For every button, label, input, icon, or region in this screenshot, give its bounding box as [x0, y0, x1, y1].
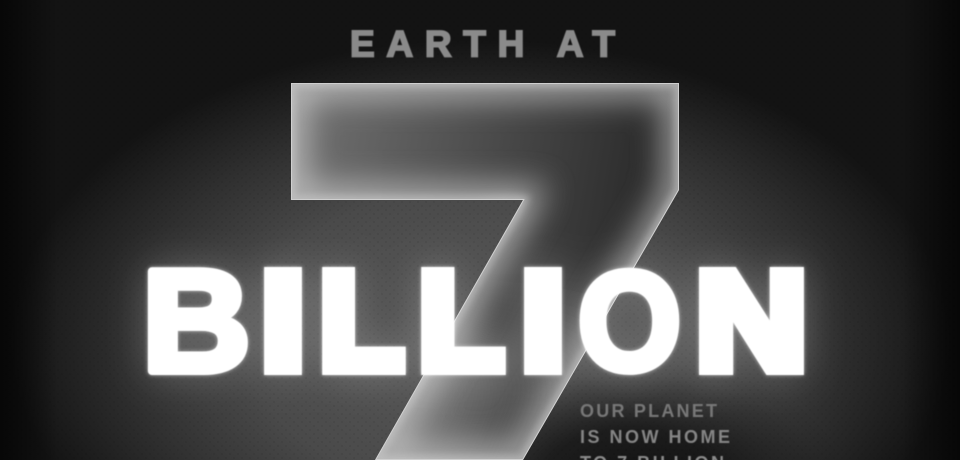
glowing word BILLION: I	[261, 244, 305, 398]
caption: our planet is now home to 7 billion: IS NOW HOME	[580, 427, 730, 447]
glowing word BILLION: N	[696, 244, 807, 398]
glowing word BILLION: I	[521, 244, 565, 398]
heading: EARTH AT: EARTH AT	[350, 24, 615, 64]
glowing word BILLION	[142, 240, 807, 402]
glowing word BILLION: O	[578, 242, 681, 400]
caption: our planet is now home to 7 billion: OUR PLANET	[580, 401, 717, 421]
large numeral 7 with inner glow	[280, 70, 690, 460]
glowing word BILLION: B	[142, 240, 250, 402]
caption: our planet is now home to 7 billion	[580, 401, 730, 460]
glowing word BILLION: L	[320, 244, 404, 398]
glowing word BILLION: L	[418, 244, 504, 398]
